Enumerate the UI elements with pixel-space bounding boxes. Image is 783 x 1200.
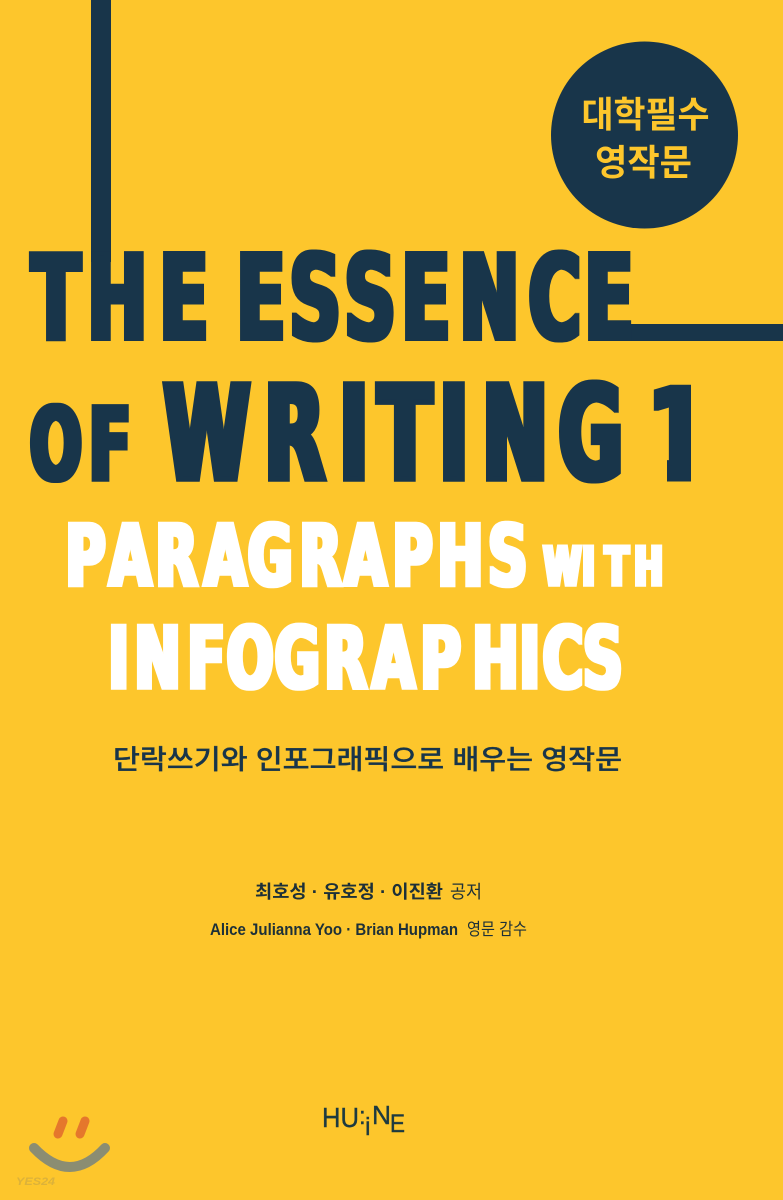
title: The Essence of Writing 1: OF xyxy=(30,386,131,504)
publisher logo: : xyxy=(359,1103,366,1130)
publisher logo: HU xyxy=(322,1102,359,1133)
icon: smile watermark: YES24 xyxy=(16,1176,55,1188)
badge: required college writing xyxy=(551,42,738,228)
editors: 영문 감수 xyxy=(467,920,527,939)
authors: 공저 xyxy=(450,882,482,902)
Korean tagline: 단락쓰기와 인포그래픽으로 배우는 영작문 xyxy=(113,745,622,775)
publisher logo: N xyxy=(372,1100,391,1130)
title: The Essence of Writing 1: 1 xyxy=(648,362,709,509)
publisher logo: i xyxy=(365,1113,371,1141)
title: The Essence of Writing 1: THE ESSENCE xyxy=(32,230,633,367)
vertical navy bar xyxy=(91,0,111,262)
publisher logo xyxy=(322,1100,405,1141)
title: The Essence of Writing 1: WRITING xyxy=(164,359,623,511)
badge: required college writing: 대학필수 xyxy=(582,94,710,135)
editors: Alice Julianna Yoo · Brian Hupman xyxy=(210,920,458,939)
subtitle: Paragraphs with Infographics xyxy=(66,507,663,710)
badge: required college writing: 영작문 xyxy=(595,142,692,183)
title: The Essence of Writing 1 xyxy=(28,250,691,484)
publisher logo: E xyxy=(390,1110,405,1138)
subtitle: Paragraphs with Infographics: WITH xyxy=(543,536,663,599)
subtitle: Paragraphs with Infographics: PARAGRAPHS xyxy=(66,507,527,606)
horizontal navy bar xyxy=(590,324,783,341)
icon: smile watermark xyxy=(16,1121,105,1188)
authors: 최호성 · 유호정 · 이진환 xyxy=(255,882,443,902)
subtitle: Paragraphs with Infographics: INFOGRAPHICS xyxy=(108,610,623,710)
